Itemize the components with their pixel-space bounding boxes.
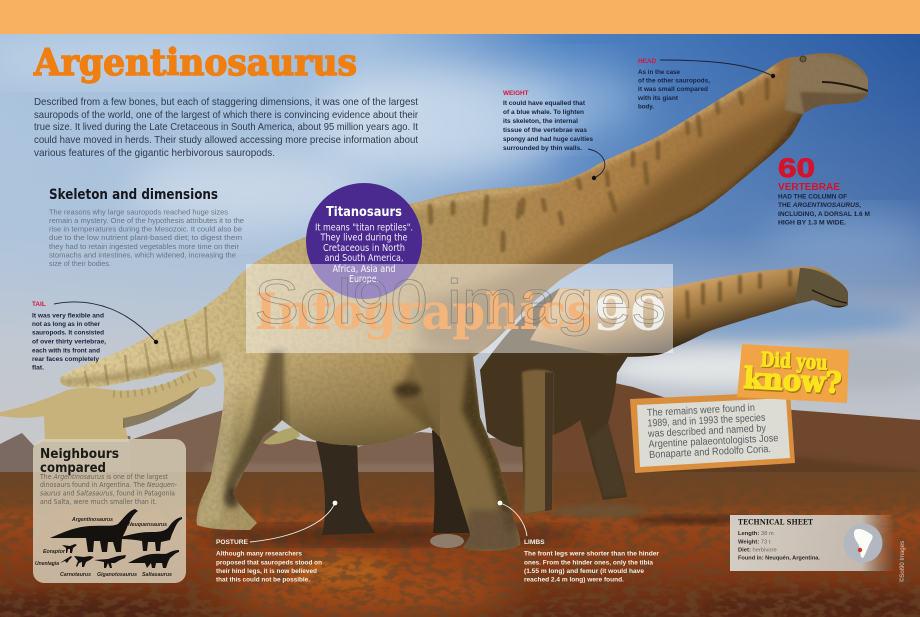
stat: 60 vertebrae — [778, 153, 870, 226]
intro text: various features of the gigantic herbivorous sauropods. — [34, 148, 275, 159]
panel: neighbours compared: Neuquensaurus — [128, 522, 167, 528]
silhouette: Giganotosaurus — [94, 555, 126, 568]
intro text: sauropods of the world, one of the largest of which there is convincing evidence about their — [34, 110, 418, 121]
neck stripes — [430, 80, 767, 250]
callout: tail: TAIL — [32, 301, 46, 308]
callout: weight: surrounded by thin walls. — [503, 145, 582, 152]
icon: locator globe — [844, 524, 882, 562]
text: skeleton and dimensions: rise in temperatures during the Mesozoic. It could also be — [49, 224, 242, 234]
callout: weight: its skeleton, the internal — [503, 118, 578, 125]
panel: neighbours compared — [33, 439, 186, 583]
callout: tail: It was very flexible and — [32, 312, 104, 320]
callout: limbs: reached 2.4 m long) were found. — [524, 576, 624, 584]
callout: limbs: LIMBS — [524, 539, 545, 546]
callout: weight — [503, 90, 605, 180]
callout: posture: proposed that sauropeds stood on — [216, 560, 322, 566]
head details — [822, 82, 868, 91]
text: skeleton and dimensions: they had to retain ingested vegetables more time on their — [49, 242, 240, 251]
far legs of main dinosaur — [313, 430, 472, 548]
panel: titanosaurs: Cretaceous in North — [323, 243, 405, 254]
panel: neighbours compared: Carnotaurus — [60, 572, 91, 578]
far dinosaur neck — [530, 267, 848, 357]
top orange band — [0, 0, 920, 34]
badge: did you know: know? — [744, 362, 843, 401]
far dinosaur legs — [522, 370, 553, 515]
text: skeleton and dimensions: size of their bodies. — [49, 259, 111, 268]
silhouette: Argentinosaurus — [50, 509, 138, 552]
skin texture — [60, 72, 772, 524]
panel: did you know note: The remains were found in — [647, 403, 755, 419]
dust at far feet — [552, 504, 648, 518]
watermark — [246, 264, 673, 353]
panel: neighbours compared: Giganotosaurus — [97, 572, 137, 578]
callout: posture: Although many researchers — [216, 550, 302, 558]
panel: neighbours compared: Neighbours — [40, 447, 119, 462]
callout: tail: sauropods. It consisted — [32, 330, 104, 336]
badge: did you know: Did you — [760, 347, 828, 375]
text: skeleton and dimensions: remain a mystery. One of the hypothesis attributes it to the — [49, 216, 244, 225]
panel: neighbours compared: Unenlagia — [35, 561, 59, 567]
badge: did you know: know? — [743, 361, 842, 400]
panel: did you know note — [630, 392, 795, 473]
panel: neighbours compared: The Argentinosaurus is one of the largest — [39, 472, 168, 481]
dinosaur shading — [60, 55, 870, 552]
callout: tail: flat. — [32, 364, 44, 372]
panel: did you know note: 1989, and in 1993 the species — [647, 413, 766, 429]
callout: tail: each with its front and — [32, 348, 100, 354]
copyright: ©Sol90 Images — [899, 541, 906, 582]
panel: titanosaurs: Titanosaurs — [326, 205, 402, 220]
callout: head: with its giant — [637, 95, 679, 102]
panel: technical sheet — [730, 515, 895, 571]
callout: limbs: ones. From the hinder ones, only the tibia — [524, 560, 653, 566]
small dinosaur — [0, 369, 216, 442]
title: Argentinosaurus — [33, 42, 357, 84]
silhouette: Saltasaurus — [128, 550, 179, 568]
panel: neighbours compared: Saltasaurus — [142, 572, 172, 578]
main dinosaur — [60, 50, 870, 555]
callout: head — [637, 58, 775, 110]
panel: neighbours compared: saurus and Saltasaurus, found in Patagonia — [40, 488, 175, 498]
text: skeleton and dimensions: stomachs and intestines, which widened, increasing the — [49, 250, 236, 260]
panel: technical sheet: Length: 38 m — [738, 531, 774, 537]
callout: posture — [216, 501, 337, 584]
callout: posture: POSTURE — [216, 539, 248, 546]
callout: head: body. — [638, 104, 654, 110]
intro text — [34, 97, 418, 159]
callout: head: As in the case — [638, 69, 680, 76]
panel: did you know note: was described and named by — [647, 423, 767, 440]
panel: did you know note: Argentine palaeontologists Jose — [648, 433, 779, 450]
silhouette: Neuquensaurus — [113, 517, 182, 551]
panel: titanosaurs — [306, 183, 422, 299]
stat: 60 vertebrae: INCLUDING, A DORSAL 1.6 M — [778, 211, 870, 218]
callout: tail: rear faces completely — [32, 356, 99, 363]
badge: did you know — [737, 344, 849, 403]
callout: limbs — [498, 501, 659, 584]
background: sky — [0, 34, 920, 474]
watermark: Infographics — [255, 282, 593, 341]
callout: head: HEAD — [638, 58, 656, 65]
far dinosaur — [263, 267, 848, 518]
text: skeleton and dimensions: due to the low nutrient plant-based diet; to digest them — [49, 233, 242, 242]
stat: 60 vertebrae: HAD THE COLUMN OF — [778, 194, 847, 200]
callout: limbs: (1.55 m long) and femur (it would have — [524, 568, 644, 575]
panel: neighbours compared: dinosaurs found in Argentina. The Neuquen- — [40, 480, 177, 489]
callout: posture: that this could not be possible. — [216, 576, 310, 584]
callout: weight: WEIGHT — [503, 90, 529, 97]
watermark: Sol90 images — [254, 268, 666, 337]
panel: technical sheet: TECHNICAL SHEET — [738, 518, 814, 526]
callout: weight: tissue of the vertebrae was — [503, 127, 587, 134]
panel: neighbours compared: compared — [40, 461, 106, 476]
silhouette: Eoraptor — [62, 544, 77, 553]
callout: weight: of a blue whale. To lighten — [503, 109, 584, 116]
badge: did you know: Did you — [761, 348, 829, 376]
panel: titanosaurs: and South America, — [324, 253, 404, 264]
callout: limbs: The front legs were shorter than the hinder — [524, 550, 659, 558]
stat: 60 vertebrae: HIGH BY 1.3 M WIDE. — [778, 220, 846, 226]
panel: titanosaurs: Africa, Asia and — [332, 264, 396, 275]
callout: posture: their hind legs, it is now believed — [216, 568, 317, 575]
stat: 60 vertebrae: 60 — [778, 153, 815, 183]
panel: neighbours compared: Argentinosaurus — [71, 517, 113, 523]
callout: tail: of over thirty vertebrae, — [32, 338, 106, 346]
intro text: true size. It lived during the Late Cretaceous in South America, about 95 million years ago. It — [34, 122, 418, 133]
panel: technical sheet: Diet: herbivore — [738, 548, 777, 554]
heading: skeleton and dimensions: Skeleton and dimensions — [49, 187, 218, 203]
panel: titanosaurs: They lived during the — [320, 232, 408, 244]
intro text: Described from a few bones, but each of staggering dimensions, it was one of the largest — [34, 97, 418, 108]
panel: titanosaurs: Europe. — [349, 274, 379, 285]
callout: tail: not as long as in other — [32, 321, 100, 328]
callout: weight: spongy and had huge cavities — [503, 136, 593, 143]
silhouette: Carnotaurus — [74, 556, 94, 567]
callout: head: of the other sauropods, — [638, 78, 710, 84]
callout: head: it was small compared — [638, 86, 708, 93]
panel: neighbours compared: Eoraptor — [43, 549, 66, 555]
panel: titanosaurs: It means "titan reptiles". — [315, 222, 413, 234]
text: skeleton and dimensions: The reasons why large sauropods reached huge sizes — [49, 208, 228, 216]
panel: technical sheet: Weight: 73 t — [738, 540, 771, 546]
callout: weight: It could have equalled that — [503, 100, 586, 107]
panel: did you know note: Bonaparte and Rodolfo Coria. — [649, 444, 771, 461]
silhouette: Unenlagia — [60, 556, 72, 563]
intro text: could have moved in herds. Their study allowed accessing more precise information about — [34, 135, 418, 146]
tail stripes — [85, 304, 208, 386]
stat: 60 vertebrae: THE ARGENTINOSAURUS, — [778, 202, 861, 209]
background: hills and ground — [0, 382, 920, 617]
watermark: 90 — [593, 287, 667, 341]
panel: neighbours compared: and Salta, were much smaller than it. — [40, 497, 157, 506]
text: skeleton and dimensions — [49, 208, 244, 268]
stat: 60 vertebrae: VERTEBRAE — [778, 182, 840, 193]
callout: tail — [32, 301, 158, 372]
panel: technical sheet: Found in: Neuquén, Argentina. — [738, 556, 820, 562]
